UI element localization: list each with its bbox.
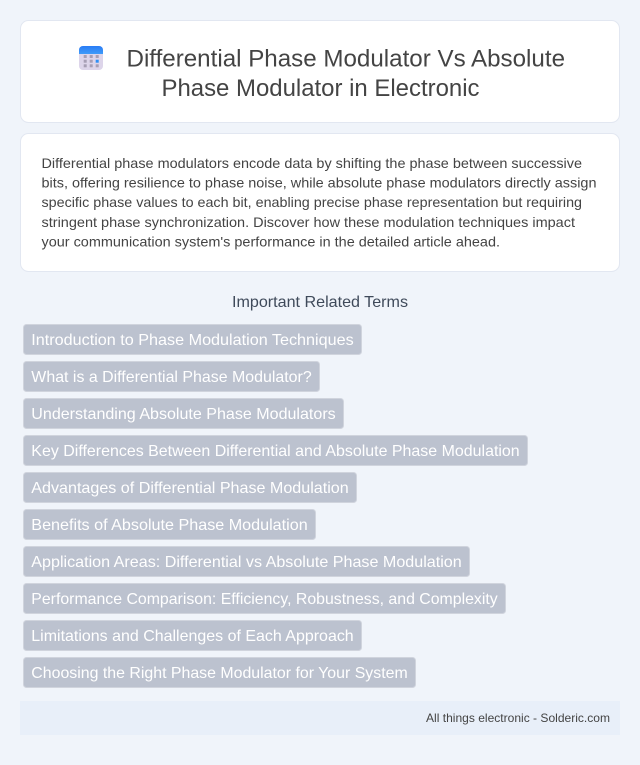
tag: choosing [24,658,416,688]
tag: advantages: Advantages of Differential Phase Modulation [31,480,349,497]
panel: title card [20,20,620,122]
icon: calendar grid [79,46,103,70]
footer: All things electronic - Solderic.com [426,711,610,725]
panel: related terms list [24,324,528,688]
description text: Differential phase modulators encode data by shifting the phase between successive [42,155,582,171]
tag: differential definition: What is a Differential Phase Modulator? [31,369,312,386]
title: Differential Phase Modulator Vs Absolute [126,46,565,73]
description text: bits, offering resilience to phase noise, while absolute phase modulators directly assign [42,175,596,191]
tag: application areas: Application Areas: Differential vs Absolute Phase Modulation [31,554,462,571]
title: Phase Modulator in Electronic [162,75,480,102]
tag: advantages [24,472,356,502]
title [126,46,565,102]
tag: introduction [24,324,362,354]
tag: benefits: Benefits of Absolute Phase Modulation [31,517,308,534]
heading: important related terms: Important Related Terms [232,294,408,311]
panel: description [20,134,620,272]
tag: introduction: Introduction to Phase Modulation Techniques [31,332,354,349]
tag: performance [24,584,506,614]
description text: stringent phase synchronization. Discover how these modulation techniques impact [42,214,575,230]
tag: choosing: Choosing the Right Phase Modulator for Your System [31,665,408,682]
tag: performance: Performance Comparison: Efficiency, Robustness, and Complexity [31,591,498,608]
description text: specific phase values to each bit, enabling precise phase representation but requiring [42,194,582,210]
tag: limitations: Limitations and Challenges of Each Approach [31,628,354,645]
tag: key differences: Key Differences Between Differential and Absolute Phase Modulation [31,443,520,460]
tag: absolute: Understanding Absolute Phase Modulators [31,406,336,423]
footer [20,701,620,735]
tag: key differences [24,436,528,466]
description text: your communication system's performance in the detailed article ahead. [42,233,500,249]
description text [42,155,596,249]
tag: limitations [24,620,362,650]
tag: differential definition [24,362,320,392]
tag: application areas [24,546,470,576]
tag: absolute [24,398,344,428]
tag: benefits [24,510,316,540]
